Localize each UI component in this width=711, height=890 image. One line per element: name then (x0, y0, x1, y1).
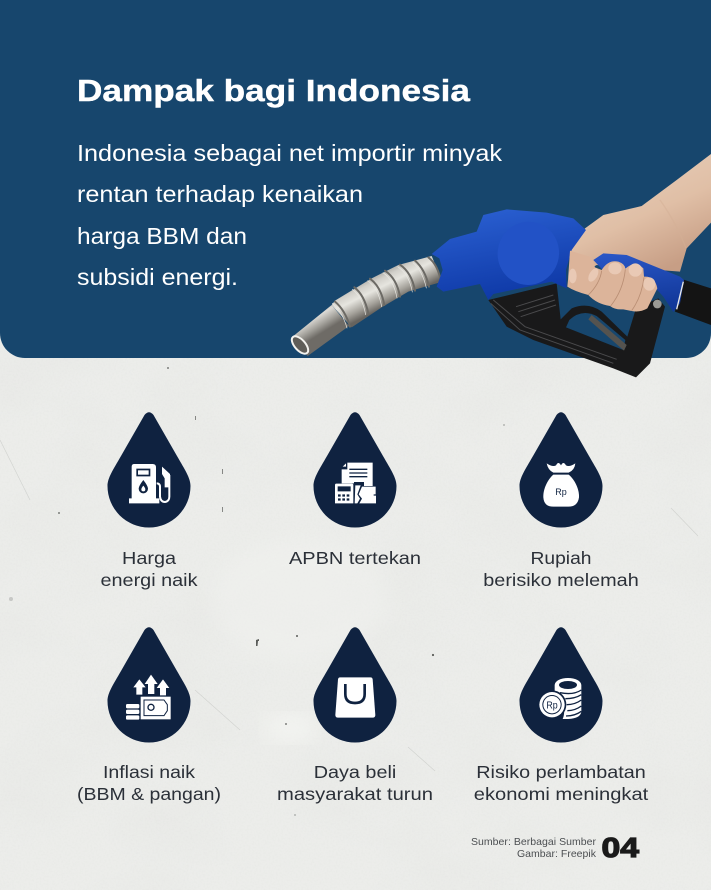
source credit (471, 836, 597, 860)
source credit: Sumber: Berbagai Sumber (471, 836, 596, 848)
fingers (567, 251, 662, 311)
label: APBN tertekan (289, 548, 421, 568)
item: Daya beli masyarakat turun (277, 627, 433, 804)
text block: intro (77, 140, 502, 290)
label: Inflasi naik (103, 762, 195, 782)
label: Rupiah (530, 548, 592, 568)
image: hand holding fuel nozzle (289, 154, 711, 377)
panel: header (0, 0, 711, 358)
item: APBN tertekan (289, 412, 421, 568)
icon: document, calculator and coins (314, 412, 396, 527)
page number: 04 (602, 832, 640, 863)
icon: money bag (520, 412, 602, 527)
label (277, 762, 433, 804)
hand and arm (569, 154, 711, 280)
spout (289, 256, 442, 356)
hose (675, 279, 711, 325)
item: Rupiah berisiko melemah (483, 412, 639, 590)
black trigger guard (488, 283, 665, 377)
icon: Rp coin stack (520, 627, 602, 742)
label: masyarakat turun (277, 784, 433, 804)
label (77, 762, 221, 804)
label (474, 762, 648, 804)
icon: banknote, coins and up arrows (108, 627, 190, 742)
label: (BBM & pangan) (77, 784, 221, 804)
label: energi naik (100, 570, 198, 590)
source credit: Gambar: Freepik (517, 848, 597, 860)
title: Dampak bagi Indonesia (77, 73, 471, 108)
label: berisiko melemah (483, 570, 639, 590)
text block: intro: subsidi energi. (77, 264, 238, 290)
icon: shopping bag (314, 627, 396, 742)
text block: intro: Indonesia sebagai net importir minyak (77, 140, 502, 166)
blue handle (593, 253, 684, 312)
label: Risiko perlambatan (476, 762, 646, 782)
item: Harga energi naik (100, 412, 198, 590)
label: Harga (122, 548, 176, 568)
label (483, 548, 639, 590)
icon: money bag: Rp (555, 487, 567, 497)
icon: Rp coin stack: Rp (546, 700, 558, 711)
label (100, 548, 198, 590)
text block: intro: rentan terhadap kenaikan (77, 181, 363, 207)
icon: fuel pump (108, 412, 190, 527)
label: ekonomi meningkat (474, 784, 648, 804)
text block: intro: harga BBM dan (77, 223, 247, 249)
item: Risiko perlambatan ekonomi meningkat (474, 627, 648, 804)
blue body (432, 209, 586, 300)
item: Inflasi naik (77, 627, 221, 804)
label: Daya beli (314, 762, 396, 782)
